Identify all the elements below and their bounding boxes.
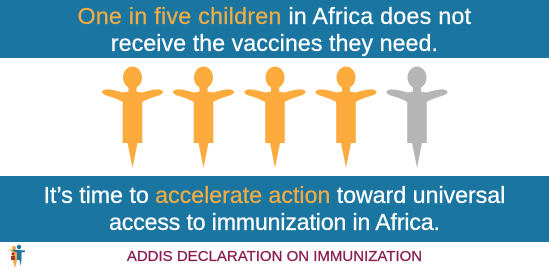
bottom banner — [0, 176, 549, 242]
call to action line two: access to immunization in Africa. — [109, 209, 440, 235]
child figure 1 — [102, 66, 163, 168]
icon: logo — [8, 244, 25, 268]
logo red figure — [11, 252, 15, 260]
heading line one: One in five children in Africa does not — [78, 3, 471, 29]
child figure 3 — [244, 66, 306, 168]
call to action line one: It’s time to accelerate action toward universal — [44, 182, 505, 208]
top banner — [0, 0, 549, 58]
pictogram: one in five children — [102, 66, 448, 168]
child figure 4 — [315, 66, 377, 168]
footer title: ADDIS DECLARATION ON IMMUNIZATION — [127, 248, 422, 265]
logo yellow figure — [8, 246, 20, 268]
child figure 5 grey — [386, 66, 448, 168]
heading line two: receive the vaccines they need. — [111, 30, 438, 56]
logo blue figure — [13, 245, 25, 266]
child figure 2 — [173, 66, 234, 168]
